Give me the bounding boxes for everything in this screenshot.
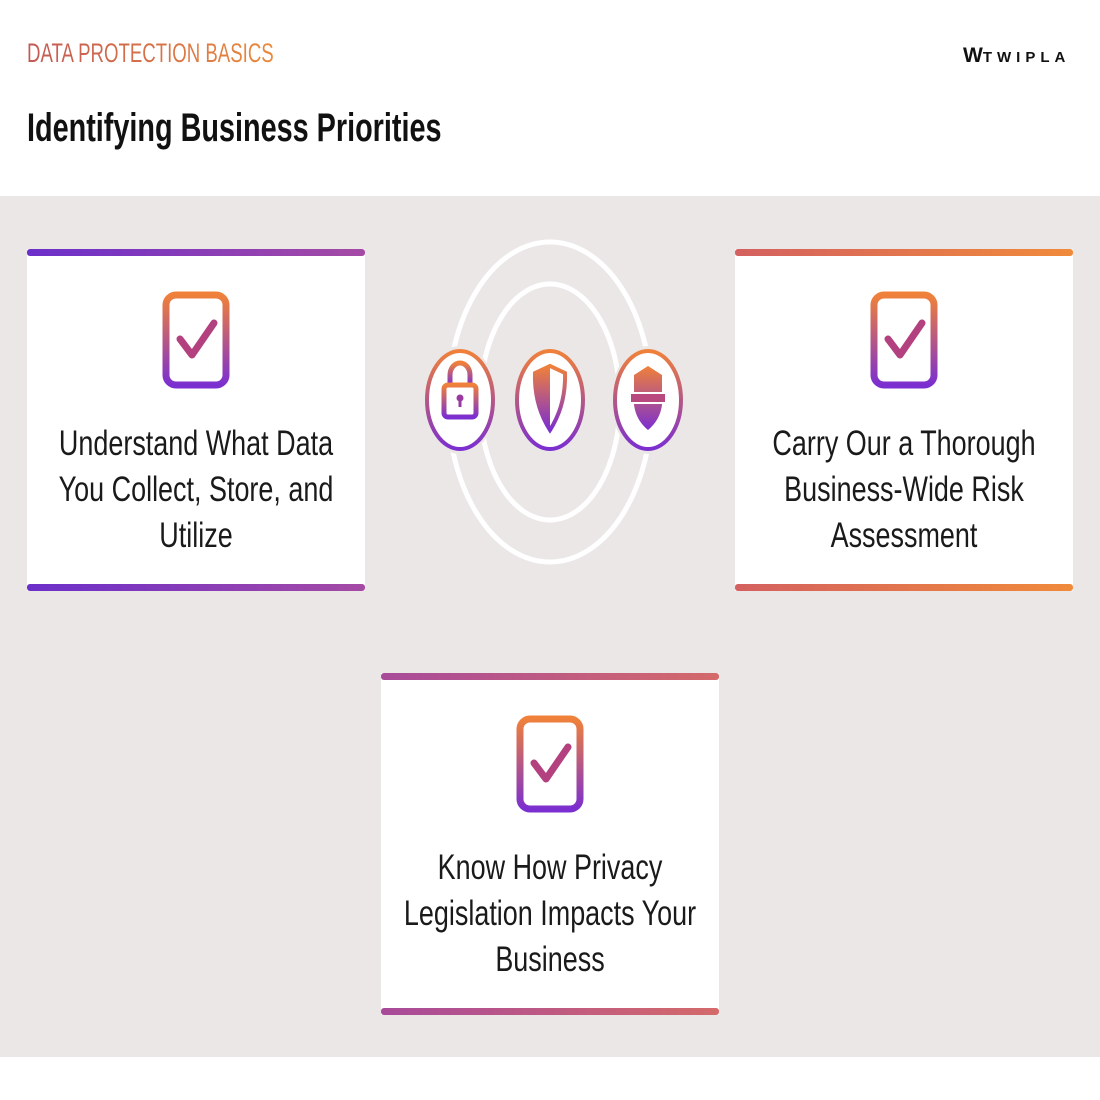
text xyxy=(59,424,334,555)
text: Utilize xyxy=(159,516,233,555)
center security graphic xyxy=(425,240,683,564)
icon: lock xyxy=(423,346,497,454)
text: You Collect, Store, and xyxy=(59,470,333,509)
icon: checkbox xyxy=(162,292,230,388)
icon: checkbox xyxy=(870,292,938,388)
logo: WTWIPLA xyxy=(963,44,1070,67)
text xyxy=(404,848,696,979)
text: Understand What Data xyxy=(59,424,333,463)
text: Legislation Impacts Your xyxy=(404,894,696,933)
text: Business-Wide Risk xyxy=(784,470,1024,509)
icon: shield xyxy=(513,346,587,454)
background band xyxy=(0,196,1100,1057)
icon: checkbox xyxy=(516,716,584,812)
title: Identifying Business Priorities xyxy=(27,106,441,150)
icon: badge shield xyxy=(611,346,685,454)
text: Carry Our a Thorough xyxy=(772,424,1036,463)
card: understand data xyxy=(27,249,365,591)
text xyxy=(772,424,1036,555)
card: privacy legislation xyxy=(381,673,719,1015)
subtitle: DATA PROTECTION BASICS xyxy=(27,38,274,68)
text: Business xyxy=(495,940,605,979)
card: risk assessment xyxy=(735,249,1073,591)
text: Assessment xyxy=(831,516,977,555)
text: Know How Privacy xyxy=(438,848,662,887)
